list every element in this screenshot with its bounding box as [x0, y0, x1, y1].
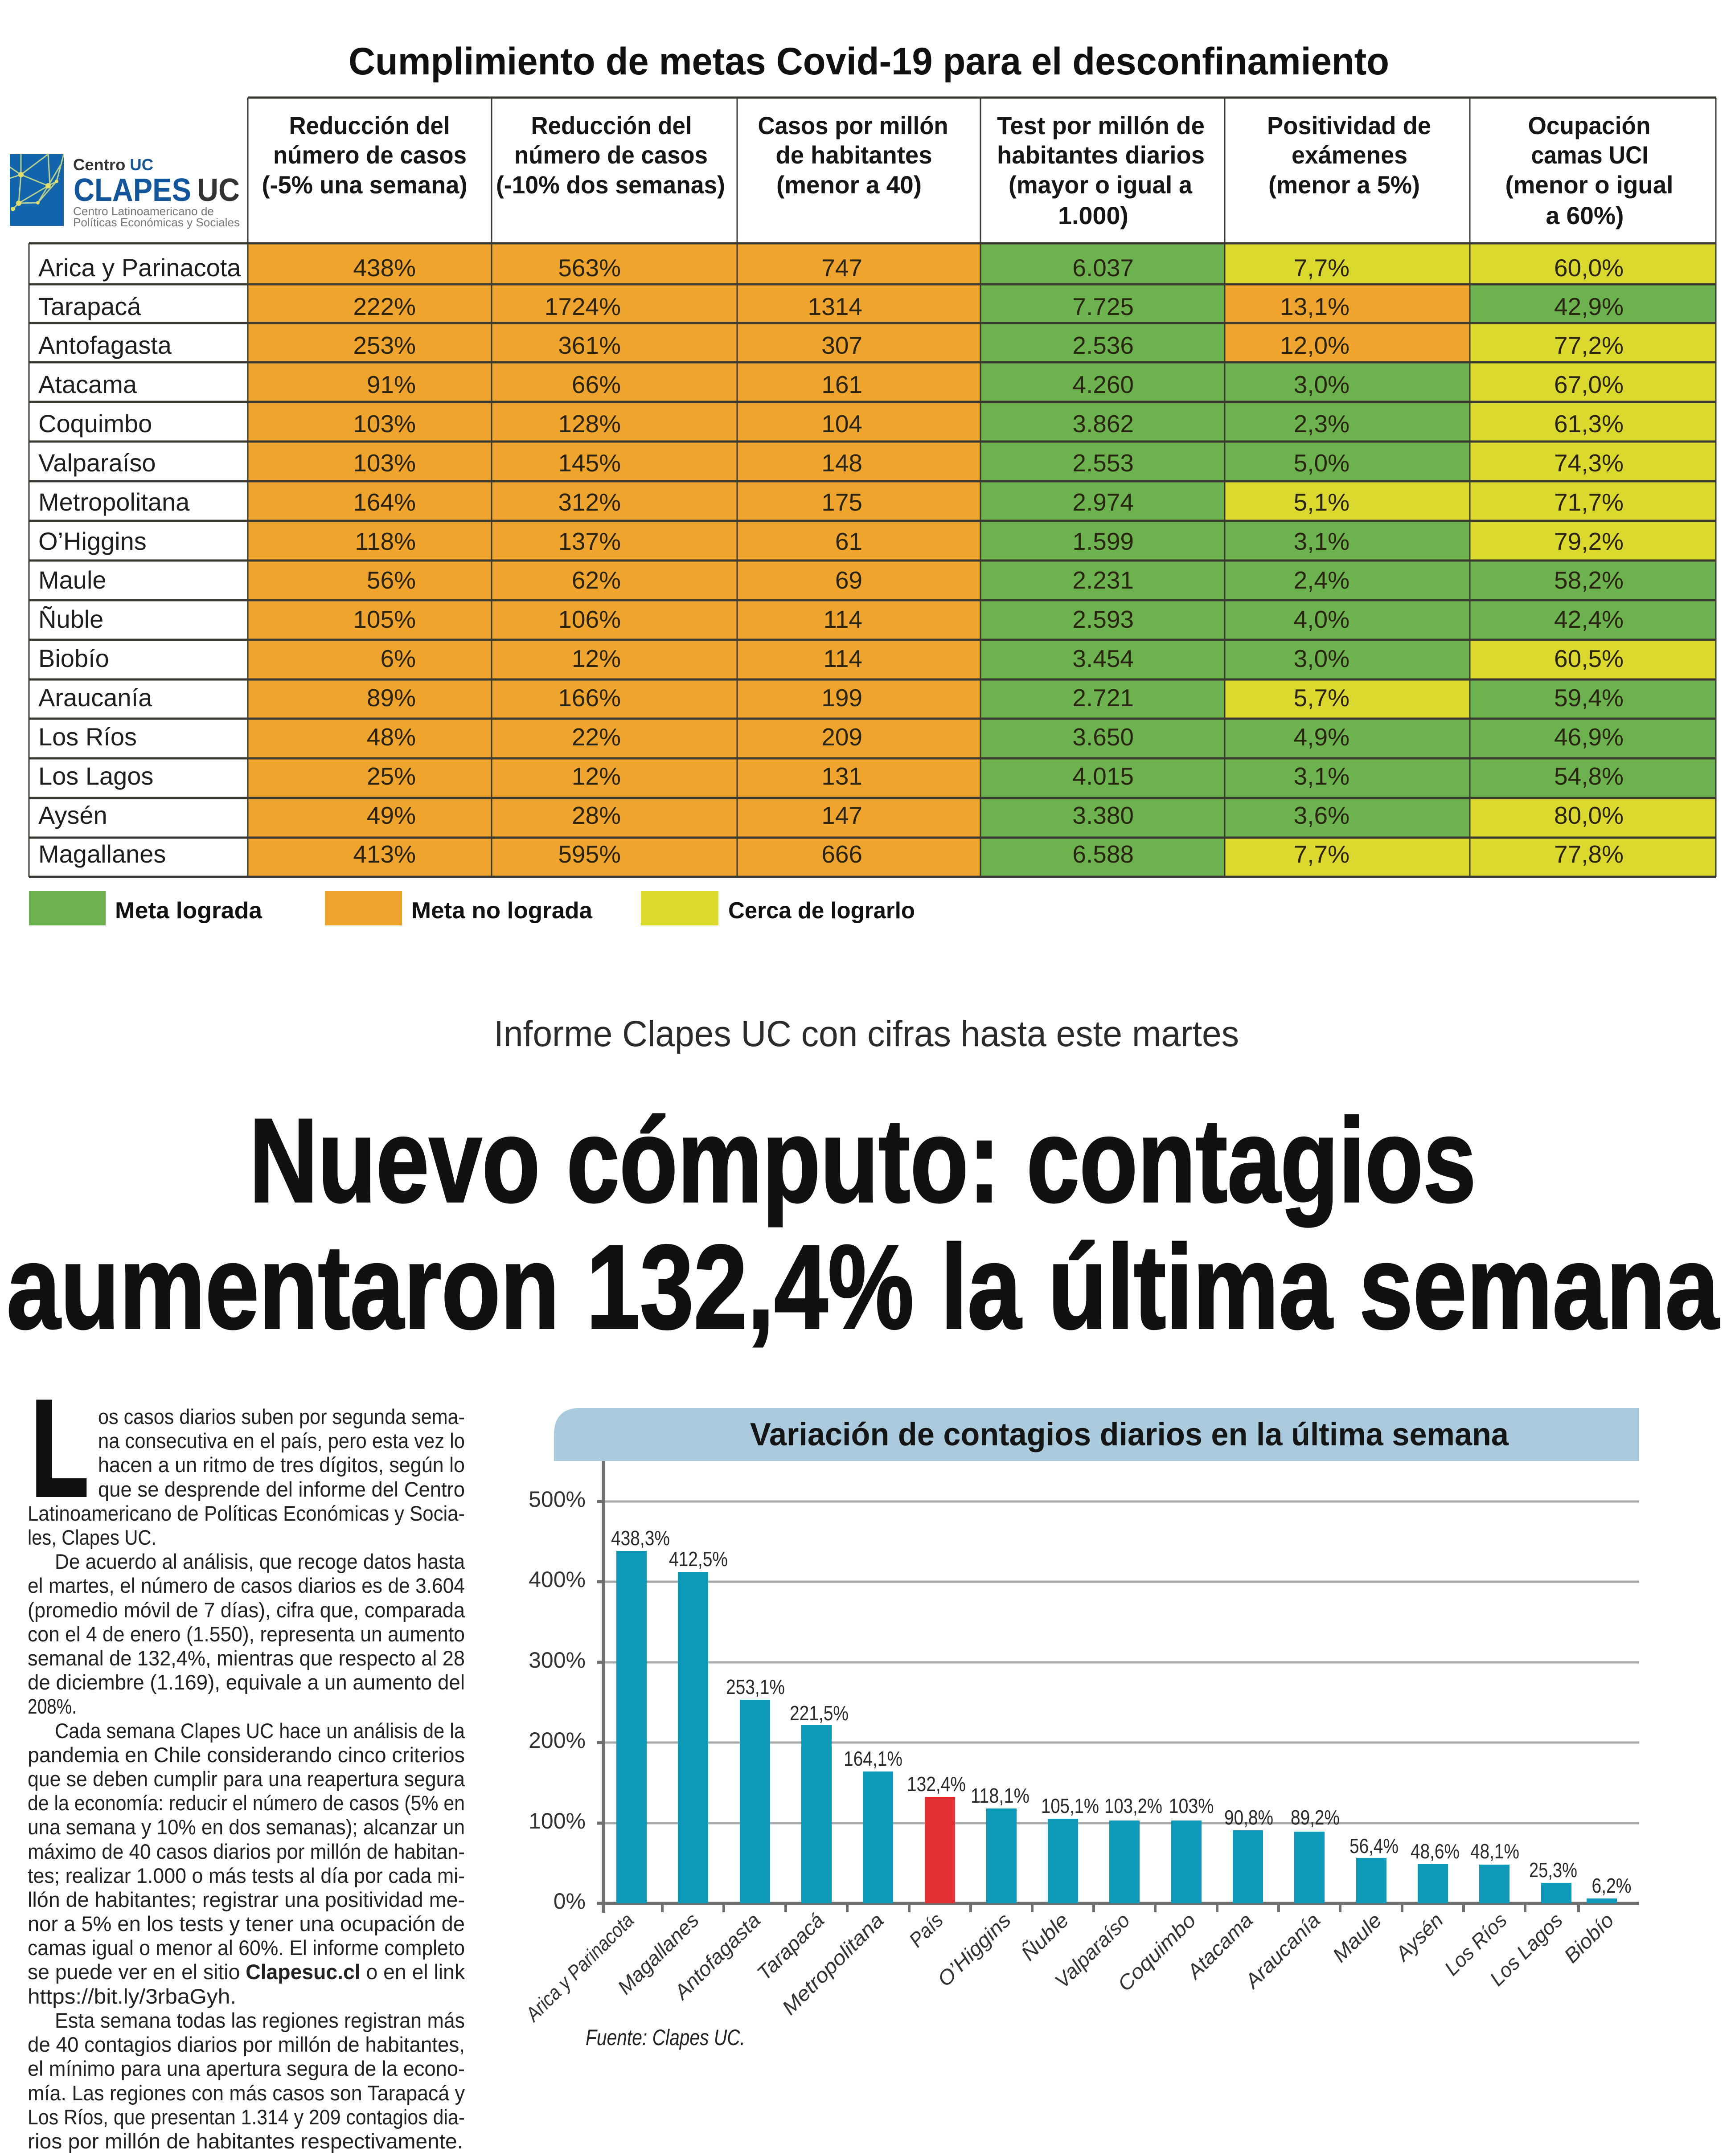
source note: Fuente: Clapes UC.	[586, 2025, 745, 2050]
header: positividad: exámenes	[1292, 141, 1407, 169]
x axis labels: Araucanía	[1239, 1908, 1325, 1993]
row: Los Lagos: 131	[821, 762, 862, 790]
article text: nor a 5% en los tests y tener una ocupación de	[28, 1912, 465, 1935]
bar value labels: 6,2%	[1592, 1874, 1631, 1897]
row: Arica y Parinacota: 6.037	[1072, 254, 1134, 282]
row: Antofagasta: 307	[821, 331, 862, 359]
row: Aysén: 49%	[367, 802, 416, 829]
row: Atacama: 66%	[572, 371, 621, 398]
row: Magallanes	[38, 838, 1716, 877]
header: reducción dos semanas: número de casos	[514, 141, 708, 169]
row: Maule: 2,4%	[1294, 566, 1349, 594]
row: Tarapacá: 42,9%	[1554, 293, 1624, 320]
header: reducción dos semanas	[496, 111, 725, 199]
legend: meta no lograda: Meta no lograda	[411, 898, 593, 924]
logo: Clapes UC: Centro Latinoamericano de	[73, 205, 214, 218]
row: Valparaíso: 103%	[353, 449, 416, 477]
bar value labels: 89,2%	[1291, 1806, 1340, 1829]
row: Maule: 58,2%	[1554, 566, 1624, 594]
article text: les, Clapes UC.	[28, 1526, 156, 1549]
article text: tes; realizar 1.000 o más tests al día por cada mi-	[28, 1864, 465, 1887]
row: Atacama: Atacama	[38, 370, 137, 398]
header: reducción una semana: (-5% una semana)	[262, 171, 467, 199]
y axis: 400%	[529, 1567, 586, 1592]
row: Los Lagos: 4.015	[1072, 762, 1134, 790]
row: Antofagasta: 12,0%	[1280, 331, 1349, 359]
article text: (promedio móvil de 7 días), cifra que, comparada	[28, 1598, 465, 1622]
article text: el mínimo para una apertura segura de la econo-	[28, 2057, 465, 2080]
row: Tarapacá: 1724%	[545, 293, 621, 320]
row: Tarapacá: 7.725	[1072, 293, 1134, 320]
header: test por millón: 1.000)	[1058, 201, 1128, 229]
x axis labels: País	[904, 1908, 947, 1951]
article text: na consecutiva en el país, pero esta vez lo	[98, 1429, 465, 1452]
row: Magallanes: 6.588	[1072, 840, 1134, 868]
row: Magallanes: Magallanes	[38, 840, 166, 868]
row: Arica y Parinacota: 747	[821, 254, 862, 282]
row: Los Lagos: 12%	[572, 762, 621, 790]
row: Arica y Parinacota: 7,7%	[1294, 254, 1349, 282]
row: Los Lagos: 25%	[367, 762, 416, 790]
bar value labels: 118,1%	[971, 1784, 1030, 1807]
article text: llón de habitantes; registrar una positividad me-	[28, 1888, 465, 1911]
y axis: 300%	[529, 1648, 586, 1673]
row: Tarapacá: 222%	[353, 293, 416, 320]
header: ocupación UCI: (menor o igual	[1505, 171, 1673, 199]
x axis labels: Magallanes	[613, 1908, 703, 1999]
row: Atacama: 67,0%	[1554, 371, 1624, 398]
bar value labels: 164,1%	[844, 1747, 902, 1770]
header: reducción una semana: Reducción del	[289, 111, 450, 139]
row: Aysén: 3.380	[1072, 802, 1134, 829]
x axis labels	[520, 1908, 1618, 2026]
bar value labels: 412,5%	[669, 1547, 728, 1571]
chart banner: Variación de contagios diarios en la última semana	[750, 1417, 1509, 1452]
row: Coquimbo	[38, 402, 1716, 442]
row: Antofagasta	[38, 323, 1716, 362]
y axis: 100%	[529, 1808, 586, 1833]
article text: Cada semana Clapes UC hace un análisis de la	[55, 1719, 465, 1743]
row: Araucanía: Araucanía	[38, 683, 152, 712]
article text: el martes, el número de casos diarios es de 3.604	[28, 1574, 465, 1597]
row: Los Ríos	[38, 719, 1716, 758]
row: Arica y Parinacota: 438%	[353, 254, 416, 282]
bar value labels: 103%	[1169, 1794, 1214, 1817]
row: Tarapacá: Tarapacá	[38, 292, 141, 320]
header: reducción dos semanas: (-10% dos semanas)	[496, 171, 725, 199]
header: casos por millón: de habitantes	[775, 141, 932, 169]
row: Araucanía: 89%	[367, 684, 416, 712]
row: Metropolitana: 71,7%	[1554, 488, 1624, 516]
article text	[28, 1372, 465, 2153]
header: test por millón: (mayor o igual a	[1009, 171, 1193, 199]
row: Metropolitana: 164%	[353, 488, 416, 516]
row: Magallanes: 7,7%	[1294, 840, 1349, 868]
article text: hacen a un ritmo de tres dígitos, según lo	[98, 1453, 465, 1477]
row: Maule: 56%	[367, 566, 416, 594]
subtitle: Informe Clapes UC con cifras hasta este martes	[494, 1014, 1239, 1054]
row: Biobío: 12%	[572, 645, 621, 672]
row: Aysén: 3,6%	[1294, 802, 1349, 829]
headline	[7, 1093, 1719, 1354]
x axis labels: Metropolitana	[777, 1908, 888, 2019]
row: Metropolitana: 175	[821, 488, 862, 516]
row: Biobío: 3,0%	[1294, 645, 1349, 672]
row: Maule: 69	[835, 566, 862, 594]
bars	[616, 1551, 1617, 1903]
row: Maule: 2.231	[1072, 566, 1134, 594]
row: Magallanes: 413%	[353, 840, 416, 868]
row: Ñuble: Ñuble	[38, 605, 103, 633]
article text: de la economía: reducir el número de casos (5% en	[28, 1791, 465, 1815]
x axis labels: Los Ríos	[1440, 1908, 1511, 1980]
header: casos por millón: (menor a 40)	[776, 171, 922, 199]
bar value labels: 105,1%	[1041, 1794, 1099, 1817]
article text: Esta semana todas las regiones registran más	[55, 2009, 465, 2032]
row: Metropolitana	[38, 481, 1716, 521]
article text: 208%.	[28, 1694, 77, 1718]
row: Los Ríos: Los Ríos	[38, 723, 137, 751]
row: Metropolitana: 5,1%	[1294, 488, 1349, 516]
row: Valparaíso: 5,0%	[1294, 449, 1349, 477]
row: Ñuble: 114	[823, 605, 862, 633]
x axis labels: Valparaíso	[1050, 1908, 1134, 1992]
row: Ñuble: 105%	[353, 605, 416, 633]
row: Los Lagos: 54,8%	[1554, 762, 1624, 790]
row: Aysén: Aysén	[38, 801, 107, 829]
bar value labels: 25,3%	[1529, 1858, 1577, 1882]
row: Antofagasta: 253%	[353, 331, 416, 359]
row: Ñuble: 2.593	[1072, 605, 1134, 633]
row: Atacama: 4.260	[1072, 371, 1134, 398]
row: Magallanes: 666	[821, 840, 862, 868]
header: casos por millón	[758, 111, 948, 199]
bar value labels: 48,1%	[1470, 1840, 1519, 1863]
row: Atacama: 161	[821, 371, 862, 398]
logo: Clapes UC: Centro UC	[73, 155, 153, 174]
row: Valparaíso	[38, 442, 1716, 481]
row: Ñuble: 106%	[558, 605, 621, 633]
row: Coquimbo: 3.862	[1072, 410, 1134, 438]
logo: Clapes UC: Políticas Económicas y Sociales	[73, 216, 240, 229]
row: Metropolitana: 2.974	[1072, 488, 1134, 516]
row: Araucanía	[38, 679, 1716, 719]
header: ocupación UCI: camas UCI	[1531, 141, 1648, 169]
y axis: 500%	[529, 1487, 586, 1512]
x axis labels: Arica y Parinacota	[520, 1908, 638, 2026]
legend: meta no lograda	[325, 891, 593, 925]
row: Tarapacá: 1314	[808, 293, 862, 320]
row: Valparaíso: 2.553	[1072, 449, 1134, 477]
logo: Clapes UC: UC	[197, 172, 240, 208]
bar value labels: 132,4%	[907, 1772, 966, 1796]
header: test por millón: habitantes diarios	[997, 141, 1205, 169]
article text: que se desprende del informe del Centro	[98, 1477, 465, 1501]
article text: rios por millón de habitantes respectivamente.	[28, 2129, 463, 2153]
row: Coquimbo: 103%	[353, 410, 416, 438]
article text: de 40 contagios diarios por millón de habitantes,	[28, 2033, 465, 2056]
row: Los Ríos: 4,9%	[1294, 723, 1349, 751]
row: Aysén: 28%	[572, 802, 621, 829]
row: Biobío: 3.454	[1072, 645, 1134, 672]
logo: Clapes UC: CLAPES	[74, 172, 191, 208]
row: Biobío: 60,5%	[1554, 645, 1624, 672]
row: Maule: 62%	[572, 566, 621, 594]
article text: pandemia en Chile considerando cinco criterios	[28, 1743, 465, 1767]
row: Valparaíso: 145%	[558, 449, 621, 477]
header: positividad: (menor a 5%)	[1268, 171, 1420, 199]
chart banner	[554, 1408, 1639, 1461]
row: Araucanía: 199	[821, 684, 862, 712]
x axis labels: Biobío	[1559, 1908, 1618, 1968]
row: Coquimbo: 104	[821, 410, 862, 438]
x axis labels: Maule	[1328, 1908, 1386, 1967]
row: Los Ríos: 48%	[367, 723, 416, 751]
row: Los Ríos: 22%	[572, 723, 621, 751]
row: Antofagasta: 361%	[558, 331, 621, 359]
row: Atacama: 91%	[367, 371, 416, 398]
row: Atacama: 3,0%	[1294, 371, 1349, 398]
row: Los Ríos: 3.650	[1072, 723, 1134, 751]
row: O'Higgins: 61	[835, 528, 862, 555]
row: O'Higgins: 1.599	[1072, 528, 1134, 555]
row: Valparaíso: 148	[821, 449, 862, 477]
header: test por millón	[997, 111, 1205, 229]
header: test por millón: Test por millón de	[997, 111, 1205, 139]
bar value labels: 438,3%	[611, 1526, 670, 1550]
y axis	[529, 1461, 1639, 1914]
x axis labels: Ñuble	[1017, 1908, 1073, 1965]
bar value labels: 103,2%	[1104, 1794, 1162, 1817]
row: Los Lagos	[38, 758, 1716, 798]
article text: Latinoamericano de Políticas Económicas y Socia-	[28, 1501, 465, 1525]
article text: Los Ríos, que presentan 1.314 y 209 contagios dia-	[28, 2105, 465, 2129]
row: Arica y Parinacota: 60,0%	[1554, 254, 1624, 282]
row: Coquimbo: 61,3%	[1554, 410, 1624, 438]
article text: que se deben cumplir para una reapertura segura	[28, 1767, 465, 1791]
bar value labels: 253,1%	[726, 1675, 785, 1698]
article text: máximo de 40 casos diarios por millón de habitan-	[28, 1840, 465, 1863]
article text: https://bit.ly/3rbaGyh.	[28, 1984, 236, 2008]
row: Los Lagos: 3,1%	[1294, 762, 1349, 790]
header: positividad	[1267, 111, 1431, 199]
row: Aysén: 147	[821, 802, 862, 829]
legend	[29, 891, 915, 925]
row: Araucanía: 2.721	[1072, 684, 1134, 712]
x axis labels: Atacama	[1181, 1908, 1257, 1984]
table header	[248, 98, 1716, 243]
legend: meta lograda: Meta lograda	[115, 898, 263, 924]
row: Los Ríos: 209	[821, 723, 862, 751]
row: Coquimbo: 2,3%	[1294, 410, 1349, 438]
x axis labels: O’Higgins	[933, 1908, 1015, 1991]
logo: Clapes UC	[10, 154, 240, 229]
article text: camas igual o menor al 60%. El informe completo	[28, 1936, 465, 1960]
table: metas por región	[29, 98, 1716, 877]
row: Antofagasta: 2.536	[1072, 331, 1134, 359]
row: Ñuble	[38, 600, 1716, 640]
row: Metropolitana: Metropolitana	[38, 488, 190, 516]
row: Ñuble: 4,0%	[1294, 605, 1349, 633]
x axis labels: Antofagasta	[669, 1908, 765, 2005]
row: Biobío: 114	[823, 645, 862, 672]
row: Biobío	[38, 640, 1716, 679]
header: positividad: Positividad de	[1267, 111, 1431, 139]
legend: cerca de lograrlo	[641, 891, 915, 925]
row: Ñuble: 42,4%	[1554, 605, 1624, 633]
article text: os casos diarios suben por segunda sema-	[98, 1405, 465, 1428]
x axis labels: Tarapacá	[752, 1908, 829, 1984]
article text: semanal de 132,4%, mientras que respecto al 28	[28, 1646, 465, 1670]
row: O'Higgins: 137%	[558, 528, 621, 555]
row: Los Lagos: Los Lagos	[38, 762, 153, 790]
row: Magallanes: 595%	[558, 840, 621, 868]
article text: De acuerdo al análisis, que recoge datos hasta	[55, 1550, 465, 1573]
row: O'Higgins: 79,2%	[1554, 528, 1624, 555]
row: Biobío: 6%	[381, 645, 416, 672]
article text: se puede ver en el sitio Clapesuc.cl o en el link	[28, 1960, 465, 1984]
x axis labels: Aysén	[1390, 1908, 1448, 1966]
row: Maule: Maule	[38, 566, 107, 594]
row: O'Higgins	[38, 521, 1716, 560]
row: Araucanía: 5,7%	[1294, 684, 1349, 712]
drop cap: L	[31, 1372, 88, 1524]
article text: con el 4 de enero (1.550), representa un aumento	[28, 1622, 465, 1646]
row: Coquimbo: Coquimbo	[38, 409, 152, 438]
row: Tarapacá: 13,1%	[1280, 293, 1349, 320]
header: reducción dos semanas: Reducción del	[531, 111, 692, 139]
row: Valparaíso: 74,3%	[1554, 449, 1624, 477]
row: Maule	[38, 560, 1716, 600]
row: Biobío: Biobío	[38, 644, 109, 672]
x axis labels: Coquimbo	[1113, 1908, 1200, 1996]
row: Arica y Parinacota: 563%	[558, 254, 621, 282]
row: Valparaíso: Valparaíso	[38, 449, 156, 477]
legend: meta lograda	[29, 891, 263, 925]
row: O'Higgins: 118%	[355, 528, 416, 555]
title: Cumplimiento de metas Covid-19 para el desconfinamiento	[349, 40, 1389, 83]
bar value labels: 90,8%	[1224, 1806, 1273, 1829]
row: O'Higgins: 3,1%	[1294, 528, 1349, 555]
row: Araucanía: 166%	[558, 684, 621, 712]
header: reducción una semana	[262, 111, 467, 199]
header: ocupación UCI: Ocupación	[1528, 111, 1651, 139]
row: Los Ríos: 46,9%	[1554, 723, 1624, 751]
header: reducción una semana: número de casos	[273, 141, 467, 169]
row: Coquimbo: 128%	[558, 410, 621, 438]
legend: cerca de lograrlo: Cerca de lograrlo	[728, 898, 915, 924]
bar value labels: 48,6%	[1411, 1840, 1460, 1863]
x axis labels: Los Lagos	[1485, 1908, 1567, 1990]
row: Tarapacá	[38, 284, 1716, 323]
article text: mía. Las regiones con más casos son Tarapacá y	[28, 2081, 465, 2105]
row: Atacama	[38, 362, 1716, 402]
row: Antofagasta: Antofagasta	[38, 331, 172, 359]
header: casos por millón: Casos por millón	[758, 111, 948, 139]
row: Araucanía: 59,4%	[1554, 684, 1624, 712]
bar value labels	[611, 1526, 1631, 1897]
row: Arica y Parinacota	[38, 243, 1716, 284]
header: ocupación UCI	[1505, 111, 1673, 229]
row: Arica y Parinacota: Arica y Parinacota	[38, 254, 241, 282]
row: O'Higgins: O’Higgins	[38, 527, 147, 555]
bar value labels: 221,5%	[790, 1702, 849, 1725]
row: Aysén: 80,0%	[1554, 802, 1624, 829]
header: ocupación UCI: a 60%)	[1546, 201, 1624, 229]
y axis: 200%	[529, 1728, 586, 1753]
bar value labels: 56,4%	[1349, 1834, 1399, 1857]
y axis: 0%	[554, 1889, 586, 1914]
row: Aysén	[38, 798, 1716, 838]
article text: de diciembre (1.169), equivale a un aumento del	[28, 1670, 465, 1694]
row: Antofagasta: 77,2%	[1554, 331, 1624, 359]
row: Magallanes: 77,8%	[1554, 840, 1624, 868]
article text: una semana y 10% en dos semanas); alcanzar un	[28, 1815, 465, 1839]
row: Metropolitana: 312%	[558, 488, 621, 516]
bar chart: variación de contagios	[520, 1408, 1639, 2050]
